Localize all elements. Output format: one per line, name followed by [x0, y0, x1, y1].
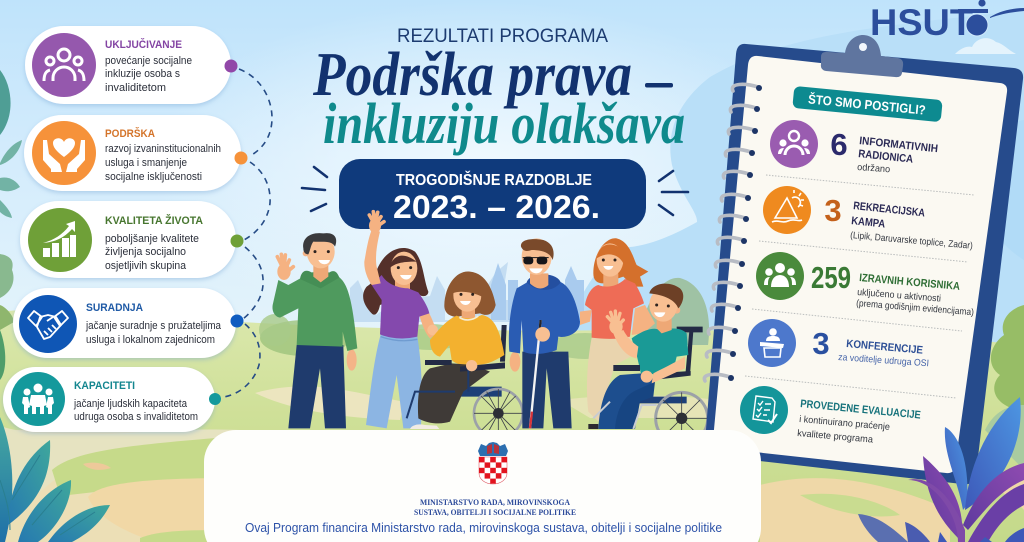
- text: suradnja: [85, 302, 222, 346]
- panel: suradnja: [13, 288, 244, 358]
- label: (prema godišnjim evidencijama): [856, 298, 974, 318]
- person: blue hoodie, cane: [509, 238, 580, 428]
- icon: group: [11, 372, 65, 426]
- illustration: group of people: [272, 212, 708, 444]
- panel: kapaciteti: [3, 367, 221, 432]
- label: uključeno u aktivnosti: [857, 287, 941, 305]
- text: uključivanje: inkluzije osoba s: [105, 68, 180, 80]
- panel: uključivanje: [25, 26, 238, 104]
- text: kapaciteti: udruga osoba s invaliditetom: [74, 411, 198, 423]
- number: 3: [824, 193, 842, 228]
- row dividers: [745, 175, 974, 398]
- panel: funding footer: [204, 430, 761, 542]
- marker: [209, 393, 221, 405]
- text: funding note: Ovaj Program financira Ministarstvo rada, mirovinskoga sustava, obitelji i socijalne politike: [245, 520, 722, 535]
- text: kvaliteta života: poboljšanje kvalitete: [105, 233, 199, 245]
- connector: dashed path between pillars: [224, 69, 272, 397]
- text: uključivanje: povećanje socijalne: [105, 55, 192, 67]
- label: KAMPA: [851, 215, 886, 231]
- label: IZRAVNIH KORISNIKA: [859, 272, 960, 293]
- text: kvaliteta života: KVALITETA ŽIVOTA: [105, 214, 203, 227]
- person: green hoodie: [272, 233, 357, 428]
- text: podrška: [105, 127, 221, 183]
- text: uključivanje: [105, 38, 192, 94]
- period banner: 2023. – 2026.: [393, 189, 600, 225]
- period banner: TROGODIŠNJE RAZDOBLJE: [396, 170, 592, 189]
- icon: group: [756, 252, 804, 300]
- panel: podrška: [24, 115, 248, 191]
- label: [838, 338, 929, 369]
- text: uključivanje: UKLJUČIVANJE: [105, 38, 182, 51]
- text: podrška: PODRŠKA: [105, 127, 155, 140]
- icon: people: [32, 33, 96, 97]
- left foreground leaves: [0, 417, 110, 542]
- person: purple top: [363, 212, 438, 428]
- stat: konferencije: [748, 319, 929, 369]
- stat: evaluacije: [740, 386, 921, 446]
- label: [856, 272, 974, 318]
- icon: lectern: [748, 319, 796, 367]
- number: 3: [812, 326, 830, 361]
- number: 259: [811, 260, 851, 295]
- icon: growth chart: [28, 208, 92, 272]
- text: kvaliteta života: življenja socijalno: [105, 246, 186, 258]
- text: ministry name: SUSTAVA, OBITELJI I SOCIJALNE POLITIKE: [414, 508, 576, 517]
- text: podrška: socijalne isključenosti: [105, 171, 202, 183]
- decorative rays: [302, 167, 688, 215]
- label: (Lipik, Daruvarske toplice, Zadar): [850, 230, 973, 252]
- label: [850, 200, 973, 252]
- paper: [713, 56, 1007, 473]
- person: coral shirt: [580, 238, 655, 429]
- person: wheelchair yellow: [407, 272, 523, 438]
- label: PROVEDENE EVALUACIJE: [800, 398, 921, 422]
- spiral rings: [704, 84, 762, 381]
- label: i kontinuirano praćenje: [799, 414, 890, 433]
- text: suradnja: SURADNJA: [86, 302, 143, 314]
- label: INFORMATIVNIH: [859, 135, 939, 155]
- label: održano: [857, 162, 890, 175]
- label: RADIONICA: [858, 148, 914, 166]
- icon: coat of arms: [478, 442, 508, 484]
- marker: [230, 234, 244, 248]
- text: suradnja: usluga i lokalnom zajednicom: [86, 334, 215, 346]
- text: podrška: razvoj izvaninstitucionalnih: [105, 143, 221, 155]
- label: [857, 135, 939, 175]
- text: kapaciteti: [73, 380, 198, 423]
- text: kapaciteti: jačanje ljudskih kapaciteta: [73, 398, 188, 410]
- text: suradnja: jačanje suradnje s pružateljima: [85, 320, 222, 332]
- text: ministry name: [414, 498, 576, 517]
- logo: HSUT: [870, 0, 1024, 43]
- title: Podrška prava: [312, 41, 632, 109]
- panel: kvaliteta života: [20, 201, 244, 278]
- label: [797, 398, 921, 446]
- left foliage: [0, 70, 22, 380]
- icon: heart hands: [32, 121, 96, 185]
- label: kvalitete programa: [797, 428, 874, 446]
- text: podrška: usluga i smanjenje: [105, 157, 187, 169]
- text: ministry name: MINISTARSTVO RADA, MIROVINSKOGA: [420, 498, 570, 507]
- person: wheelchair teal: [593, 284, 708, 444]
- stat: kamp: [763, 186, 973, 252]
- clip: [821, 35, 903, 77]
- marker: [224, 60, 238, 72]
- label: za voditelje udruga OSI: [838, 352, 929, 369]
- text: kvaliteta života: [105, 214, 203, 272]
- notebook clipboard: [704, 35, 1023, 484]
- period banner: [339, 159, 646, 229]
- marker: [234, 152, 248, 164]
- stat: radionice: [770, 120, 939, 175]
- badge: što smo postigli: ŠTO SMO POSTIGLI?: [808, 91, 926, 118]
- number: 6: [830, 127, 848, 162]
- label: REKREACIJSKA: [853, 200, 926, 220]
- badge: što smo postigli: [792, 86, 943, 122]
- text: kvaliteta života: osjetljivih skupina: [105, 260, 187, 272]
- logo: HSUT: HSUT: [870, 2, 973, 43]
- right foreground leaves: [858, 397, 1024, 542]
- board: [705, 44, 1023, 484]
- icon: checklist: [740, 386, 788, 434]
- text: uključivanje: invaliditetom: [105, 82, 166, 94]
- title: inkluziju olakšava: [323, 91, 685, 156]
- icon: tent and sun: [763, 186, 811, 234]
- stat: korisnici: [756, 252, 974, 318]
- ground lower-left: [0, 430, 240, 542]
- icon: handshake: [19, 295, 77, 353]
- marker: [230, 314, 244, 328]
- icon: people: [770, 120, 818, 168]
- heading: rezultati programa: REZULTATI PROGRAMA: [397, 26, 608, 47]
- text: kapaciteti: KAPACITETI: [74, 380, 135, 392]
- title: [312, 41, 685, 156]
- label: KONFERENCIJE: [846, 338, 923, 357]
